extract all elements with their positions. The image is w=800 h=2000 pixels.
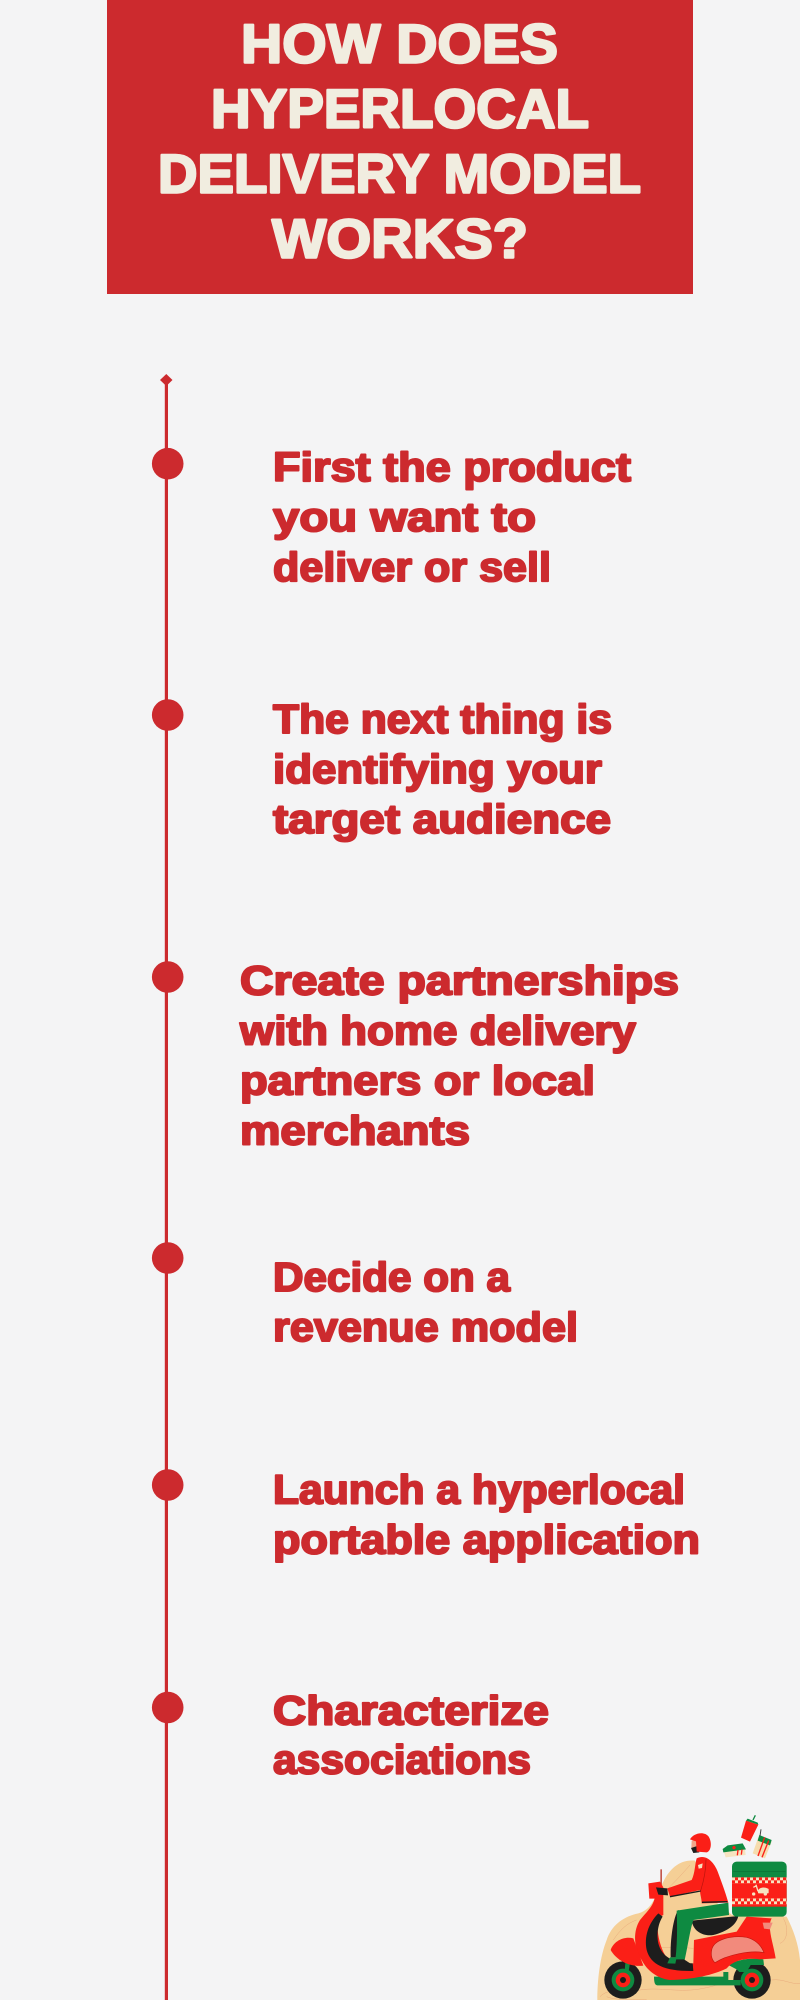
rider face and mask bbox=[691, 1839, 699, 1853]
seat bbox=[692, 1916, 738, 1935]
rear light bbox=[763, 1923, 773, 1929]
title banner bbox=[107, 0, 693, 294]
front fender bbox=[611, 1938, 643, 1966]
front wheel bbox=[604, 1961, 642, 1999]
shoes bbox=[670, 1959, 693, 1970]
rider near leg bbox=[675, 1903, 729, 1960]
step 1 text bbox=[273, 444, 631, 590]
step 1 text: deliver or sell bbox=[273, 544, 551, 590]
step 3 text: partners or local bbox=[240, 1058, 595, 1104]
box scooter icon bbox=[753, 1885, 768, 1893]
footboard and swingarm bbox=[654, 1959, 764, 1985]
title banner: HYPERLOCAL bbox=[211, 78, 589, 140]
step 4 text: revenue model bbox=[273, 1304, 578, 1350]
step 2 text: target audience bbox=[273, 796, 611, 842]
leg shield and body bbox=[635, 1897, 776, 1980]
step 6 text: Characterize bbox=[273, 1688, 549, 1734]
rider torso and arm bbox=[667, 1857, 728, 1903]
step 3 text: Create partnerships bbox=[240, 958, 679, 1004]
step 2 text: identifying your bbox=[273, 746, 602, 792]
rider far leg bbox=[671, 1910, 683, 1957]
flying bag bbox=[753, 1829, 772, 1858]
helmet bbox=[690, 1833, 711, 1852]
step 1 text: you want to bbox=[273, 494, 536, 540]
step 5 text bbox=[273, 1466, 700, 1562]
step 2 text bbox=[273, 696, 612, 842]
beige backdrop blob bbox=[597, 1861, 800, 2000]
step 3 text: merchants bbox=[240, 1108, 470, 1154]
title banner: HOW DOES bbox=[241, 14, 558, 74]
flying food box bbox=[723, 1843, 746, 1857]
handlebar, mirror and glove bbox=[648, 1869, 668, 1900]
flying cup bbox=[741, 1815, 758, 1842]
step 4 text: Decide on a bbox=[273, 1254, 510, 1300]
step 5 text: portable application bbox=[273, 1516, 700, 1562]
step 4 text bbox=[273, 1254, 578, 1350]
sleeve badge bbox=[698, 1863, 703, 1869]
step 1 text: First the product bbox=[273, 444, 631, 490]
side panel bbox=[711, 1937, 764, 1963]
timeline bbox=[152, 374, 184, 2000]
illustration: delivery rider on scooter bbox=[597, 1815, 800, 2000]
title banner: DELIVERY MODEL bbox=[158, 144, 641, 204]
contour lines bbox=[600, 1865, 800, 2000]
step 6 text: associations bbox=[273, 1736, 531, 1782]
step 3 text bbox=[239, 958, 679, 1154]
step 5 text: Launch a hyperlocal bbox=[273, 1466, 685, 1512]
delivery box bbox=[732, 1862, 787, 1917]
inner black shield bbox=[646, 1913, 693, 1971]
step 2 text: The next thing is bbox=[273, 696, 612, 742]
rear wheel bbox=[733, 1961, 771, 1999]
title banner: WORKS? bbox=[272, 208, 528, 270]
step 6 text bbox=[273, 1688, 549, 1782]
step 3 text: with home delivery bbox=[239, 1008, 637, 1054]
